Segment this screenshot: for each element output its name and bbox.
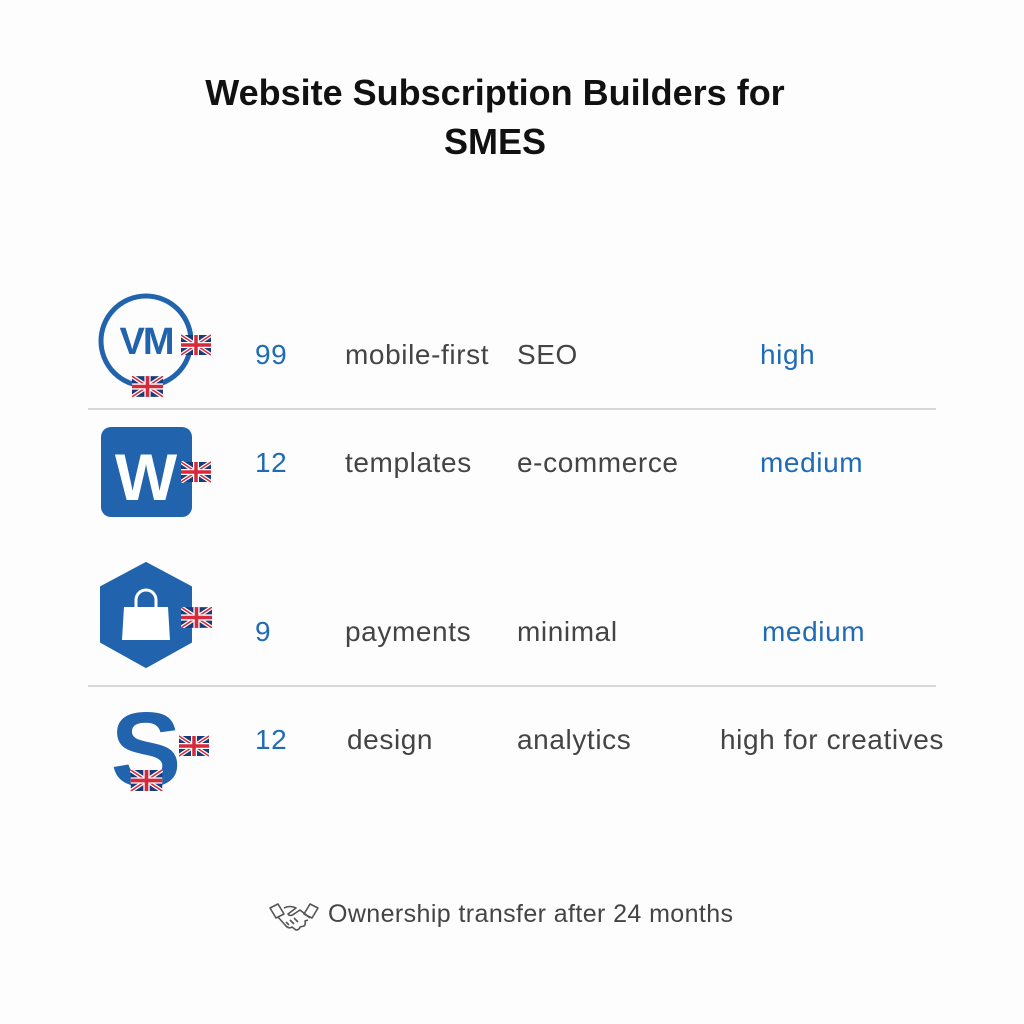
text: analytics xyxy=(517,724,631,755)
text: SEO xyxy=(517,339,578,370)
text: payments xyxy=(345,616,471,647)
text: mobile-first xyxy=(345,339,489,370)
icon: VM logo xyxy=(98,294,211,397)
title: Website Subscription Builders for xyxy=(205,72,785,113)
footer note: Ownership transfer after 24 months xyxy=(328,900,733,928)
text: medium xyxy=(760,447,863,478)
row 4 xyxy=(255,724,944,755)
text: high xyxy=(760,339,815,370)
text: design xyxy=(347,724,433,755)
text: 9 xyxy=(255,616,271,647)
text: 12 xyxy=(255,724,287,755)
text: e-commerce xyxy=(517,447,679,478)
row 2 xyxy=(255,447,863,478)
text: medium xyxy=(762,616,865,647)
title: SMES xyxy=(444,121,546,162)
icon: shopping bag hexagon xyxy=(100,562,212,668)
title xyxy=(205,72,785,162)
row 1 xyxy=(255,339,815,370)
icon: W logo xyxy=(101,427,211,517)
text: high for creatives xyxy=(720,724,944,755)
row 3 xyxy=(255,616,865,647)
text: minimal xyxy=(517,616,618,647)
text: templates xyxy=(345,447,472,478)
text: 12 xyxy=(255,447,287,478)
icon: W logo: W xyxy=(115,440,178,514)
icon: VM logo: VM xyxy=(120,321,173,363)
icon: handshake xyxy=(269,903,319,931)
text: 99 xyxy=(255,339,287,370)
